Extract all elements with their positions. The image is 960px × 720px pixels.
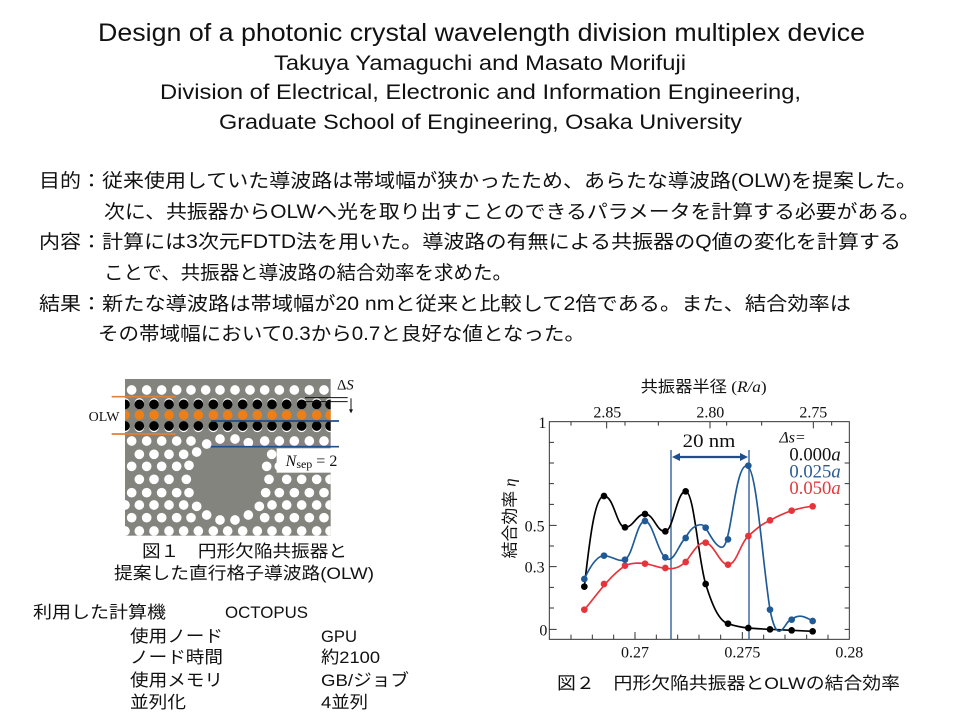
black hole rows [125, 404, 330, 426]
purpose line 1: 従来使用していた導波路は帯域幅が狭かったため、あらたな導波路(OLW)を提案した。 [102, 170, 917, 192]
axis tick labels: 2.80 [696, 404, 724, 421]
authors: Takuya Yamaguchi and Masato Morifuji [274, 52, 686, 75]
N sep label: = 2 [312, 453, 337, 470]
axis tick labels: 1 [538, 415, 546, 432]
crystal background [125, 379, 331, 536]
N sep label: N [285, 453, 298, 470]
N sep label: sep [296, 457, 312, 471]
parallel value: 4並列 [321, 693, 368, 712]
purpose line 2: 次に、共振器からOLWへ光を取り出すことのできるパラメータを計算する必要がある。 [104, 201, 920, 223]
caption line 2: 提案した直行格子導波路(OLW) [114, 564, 374, 583]
memory value: GB/ジョブ [321, 670, 409, 690]
node value: GPU [321, 627, 357, 646]
top axis title: 共振器半径 (R/a) [641, 378, 767, 396]
legend: 0.050a [789, 478, 841, 499]
summary text block [39, 170, 920, 345]
title: Design of a photonic crystal wavelength division multiplex device [98, 19, 865, 47]
axis tick labels: 2.85 [593, 404, 621, 421]
y axis title: 結合効率 η [500, 478, 519, 558]
series: 0.025a (blue) [584, 466, 813, 631]
axis tick labels [525, 404, 863, 661]
orange waveguide lines [112, 397, 176, 434]
axis tick labels: 0.27 [621, 644, 649, 661]
axis tick labels: 0.28 [835, 644, 863, 661]
plot frame and ticks [549, 422, 849, 639]
figure 1: photonic crystal diagram [89, 377, 354, 536]
computer name: OCTOPUS [225, 603, 308, 622]
N sep label [277, 448, 343, 473]
content line 1: 計算には3次元FDTD法を用いた。導波路の有無による共振器のQ値の変化を計算する [102, 231, 901, 253]
result line 2: その帯域幅において0.3から0.7と良好な値となった。 [98, 323, 585, 345]
series: 0.050a (red) [584, 506, 813, 610]
axis tick labels: 0.3 [525, 560, 545, 577]
axis tick labels: 0 [539, 622, 547, 639]
axis tick labels: 0.275 [724, 644, 760, 661]
caption line 1: 図１ 円形欠陥共振器と [142, 542, 347, 561]
node time label: ノード時間 [130, 648, 223, 667]
node time value: 約2100 [321, 648, 380, 667]
legend: 0.025a [789, 461, 841, 482]
affiliation line 2: Graduate School of Engineering, Osaka University [219, 111, 743, 134]
memory label: 使用メモリ [130, 670, 223, 690]
node label: 使用ノード [130, 626, 223, 646]
affiliation line 1: Division of Electrical, Electronic and Information Engineering, [160, 81, 801, 104]
20 nm bandwidth marker [671, 431, 749, 639]
parallel label: 並列化 [130, 693, 186, 712]
axis tick labels: 2.75 [799, 404, 827, 421]
computer usage table [33, 603, 409, 712]
legend [778, 430, 841, 499]
legend: Δs= [778, 430, 806, 447]
purpose label: 目的： [39, 170, 102, 192]
result line 1: 新たな導波路は帯域幅が20 nmと従来と比較して2倍である。また、結合効率は [102, 293, 851, 315]
content line 2: ことで、共振器と導波路の結合効率を求めた。 [104, 262, 512, 284]
20 nm bandwidth marker: 20 nm [683, 431, 735, 452]
white air holes [125, 390, 330, 531]
axis tick labels: 0.5 [525, 518, 545, 535]
blue separation lines [211, 421, 339, 447]
delta S marker [305, 377, 354, 413]
OLW label: OLW [89, 410, 120, 425]
orange hole row [125, 410, 331, 420]
figure 1 caption [114, 542, 374, 583]
figure 2: coupling efficiency line chart [500, 378, 863, 661]
delta S marker: ΔS [337, 377, 354, 393]
legend: 0.000a [789, 444, 841, 465]
title block [98, 19, 865, 134]
computer label: 利用した計算機 [33, 603, 166, 622]
figure 2 caption: 図２ 円形欠陥共振器とOLWの結合効率 [557, 674, 900, 693]
result label: 結果： [39, 293, 102, 315]
content label: 内容： [39, 231, 102, 253]
series: 0.000a (black) [584, 491, 813, 631]
